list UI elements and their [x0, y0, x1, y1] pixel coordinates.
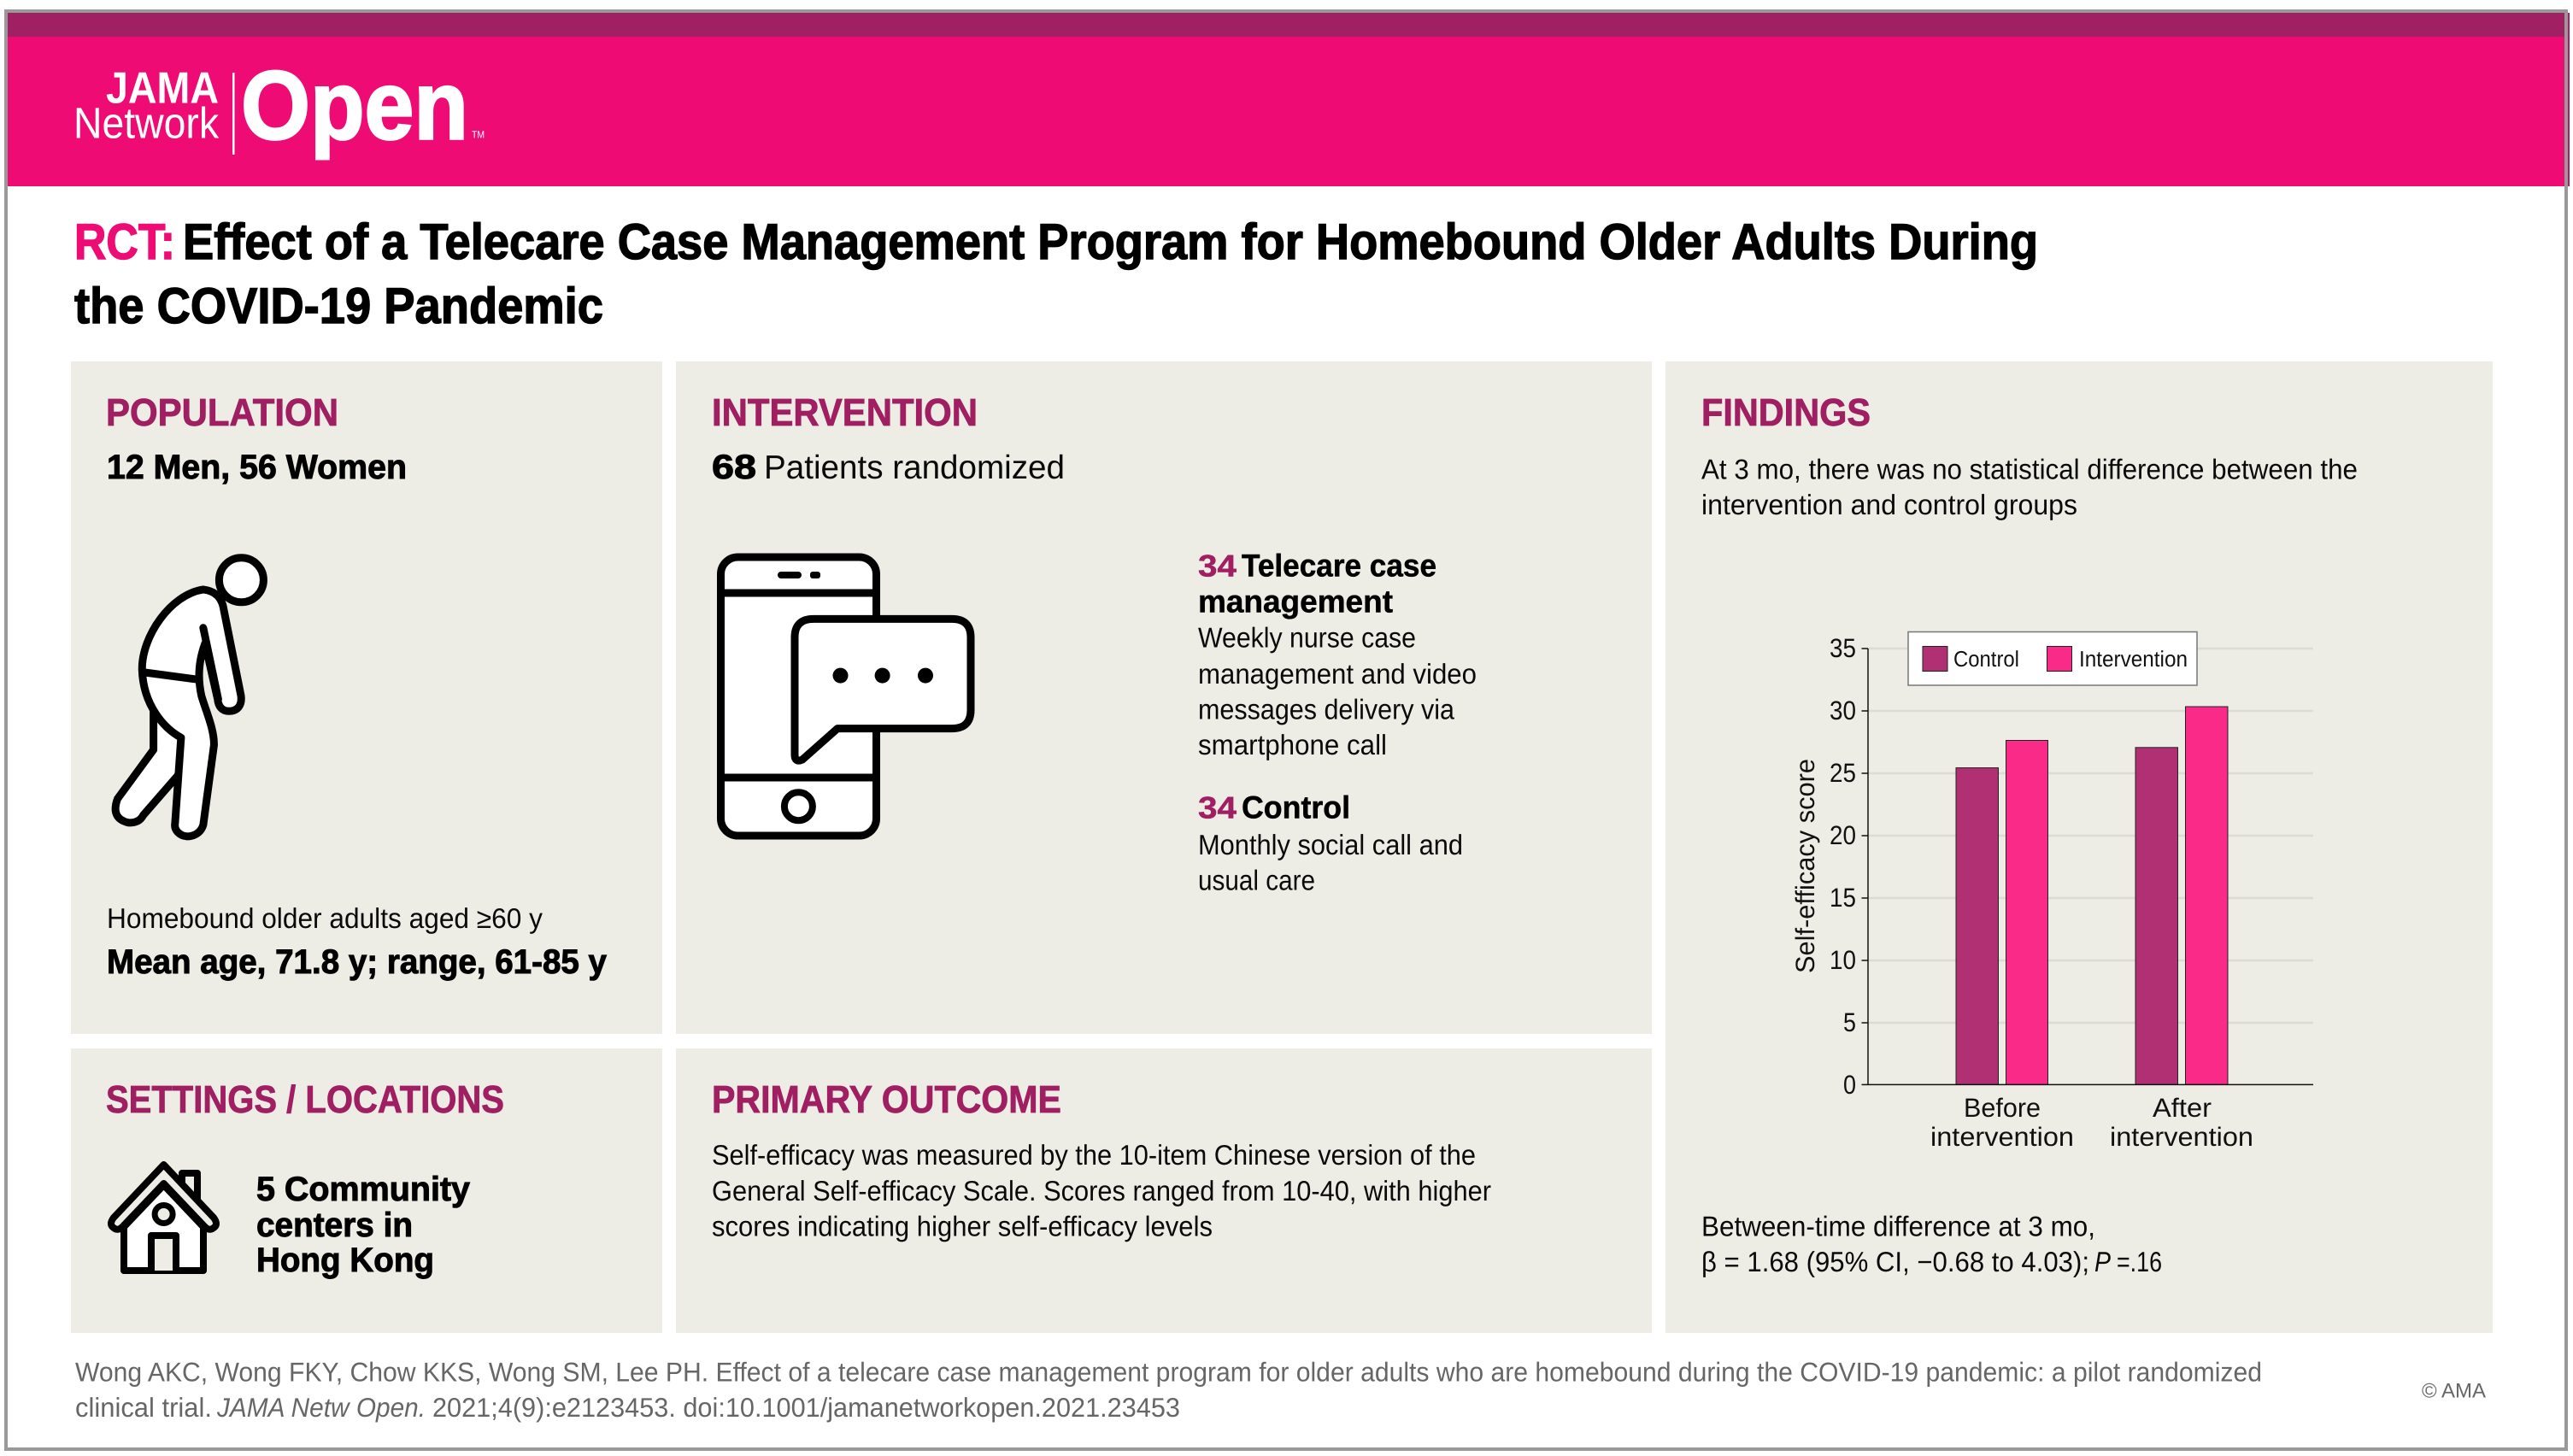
- icon: stooped older person: [115, 558, 263, 837]
- panel: primary outcome: [676, 1048, 1652, 1333]
- text: age: Mean age, 71.8 y; range, 61-85 y: [107, 943, 608, 981]
- citation: 2021;4(9):e2123453. doi:10.1001/jamanetworkopen.2021.23453: [432, 1392, 1180, 1423]
- text: community centers: Hong Kong: [256, 1242, 434, 1279]
- x-axis labels: intervention: [2110, 1122, 2253, 1152]
- bars: [1956, 707, 2228, 1084]
- text: men and women counts: 12 Men, 56 Women: [107, 449, 407, 486]
- text: patients randomized: Patients randomized: [764, 449, 1065, 486]
- title: Effect of a Telecare Case Management Program for Homebound Older Adults During: [183, 214, 2038, 270]
- text: community centers: centers in: [256, 1206, 413, 1244]
- text: between-time difference: Between-time difference at 3 mo,: [1701, 1211, 2095, 1242]
- icon: house: [111, 1165, 216, 1271]
- text: control arm: usual care: [1198, 865, 1315, 896]
- text: outcome description: [712, 1139, 1491, 1242]
- text: between-time difference: =.16: [2117, 1246, 2162, 1277]
- heading: population: POPULATION: [106, 390, 338, 434]
- title: the COVID-19 Pandemic: [74, 278, 603, 334]
- title: [74, 214, 2038, 334]
- text: control arm: Control: [1242, 790, 1350, 825]
- text: control arm: Monthly social call and: [1198, 829, 1463, 860]
- text: telecare arm: smartphone call: [1198, 729, 1387, 760]
- panel: population: [71, 361, 662, 1034]
- x-axis labels: After: [2153, 1093, 2212, 1123]
- text: community centers: 5 Community: [256, 1171, 471, 1208]
- text: outcome description: General Self-efficacy Scale. Scores ranged from 10-40, with higher: [712, 1175, 1491, 1206]
- y-axis tick labels: 0: [1843, 1070, 1856, 1100]
- citation: [75, 1357, 2262, 1423]
- logo: JAMA Network Open: JAMA: [106, 64, 219, 114]
- logo: JAMA Network Open: [73, 51, 485, 160]
- panel: settings and locations: [71, 1048, 662, 1333]
- axes: [1861, 649, 2313, 1084]
- x-axis labels: Before: [1964, 1093, 2041, 1123]
- text: telecare arm: management and video: [1198, 658, 1477, 690]
- text: control arm: 34: [1198, 790, 1237, 825]
- y-axis tick labels: 15: [1830, 883, 1856, 913]
- logo: JAMA Network Open: Open: [241, 51, 468, 160]
- citation: JAMA Netw Open.: [216, 1392, 426, 1423]
- heading: primary outcome: PRIMARY OUTCOME: [712, 1077, 1061, 1121]
- text: telecare arm: messages delivery via: [1198, 694, 1455, 725]
- panel: intervention: [676, 361, 1652, 1034]
- text: control arm: [1198, 790, 1463, 896]
- text: community centers: [256, 1171, 471, 1279]
- x-axis labels: [1930, 1093, 2253, 1152]
- citation: Wong AKC, Wong FKY, Chow KKS, Wong SM, Lee PH. Effect of a telecare case management program for older adults who are homebound during the COVID-19 pandemic: a pilot randomized: [75, 1357, 2262, 1388]
- copyright: © AMA: [2422, 1380, 2486, 1403]
- y-axis tick labels: 35: [1830, 633, 1856, 663]
- text: outcome description: scores indicating higher self-efficacy levels: [712, 1211, 1213, 1242]
- panel: findings: [1665, 361, 2493, 1333]
- text: telecare arm: management: [1198, 584, 1393, 619]
- legend: [1908, 632, 2197, 685]
- text: between-time difference: β = 1.68 (95% CI, −0.68 to 4.03);: [1701, 1246, 2089, 1277]
- title: RCT:: [74, 214, 175, 270]
- y-axis tick labels: 25: [1830, 758, 1856, 788]
- y-axis tick labels: 30: [1830, 696, 1856, 725]
- x-axis labels: intervention: [1930, 1122, 2074, 1152]
- y-axis title: Self-efficacy score: [1790, 759, 1820, 973]
- heading: findings: FINDINGS: [1701, 390, 1871, 434]
- bar chart: self-efficacy score: [1790, 632, 2313, 1152]
- text: eligibility: Homebound older adults aged ≥60 y: [107, 902, 543, 934]
- text: between-time difference: [1701, 1211, 2162, 1277]
- text: findings summary: [1701, 454, 2358, 520]
- header banner: [6, 13, 2566, 186]
- citation: clinical trial.: [75, 1392, 212, 1423]
- text: findings summary: intervention and control groups: [1701, 489, 2077, 520]
- text: between-time difference: P: [2094, 1246, 2111, 1277]
- text: telecare arm: Weekly nurse case: [1198, 622, 1416, 654]
- text: telecare arm: Telecare case: [1242, 548, 1436, 583]
- logo: JAMA Network Open: TM: [472, 129, 485, 141]
- text: findings summary: At 3 mo, there was no statistical difference between the: [1701, 454, 2358, 485]
- text: telecare arm: 34: [1198, 548, 1237, 583]
- heading: intervention: INTERVENTION: [712, 390, 978, 434]
- y-axis tick labels: 10: [1830, 945, 1856, 975]
- legend: Control: [1953, 646, 2019, 672]
- text: patients randomized: 68: [712, 449, 756, 486]
- text: telecare arm: [1198, 548, 1477, 760]
- y-axis tick labels: 20: [1830, 820, 1856, 850]
- icon: smartphone with speech bubble: [721, 557, 971, 836]
- legend: Intervention: [2079, 646, 2188, 672]
- text: outcome description: Self-efficacy was measured by the 10-item Chinese version of the: [712, 1139, 1476, 1171]
- y-axis tick labels: 5: [1843, 1007, 1856, 1037]
- heading: settings / locations: SETTINGS / LOCATIONS: [106, 1077, 504, 1121]
- y-axis tick labels: [1830, 633, 1856, 1100]
- logo: JAMA Network Open: Network: [73, 99, 219, 148]
